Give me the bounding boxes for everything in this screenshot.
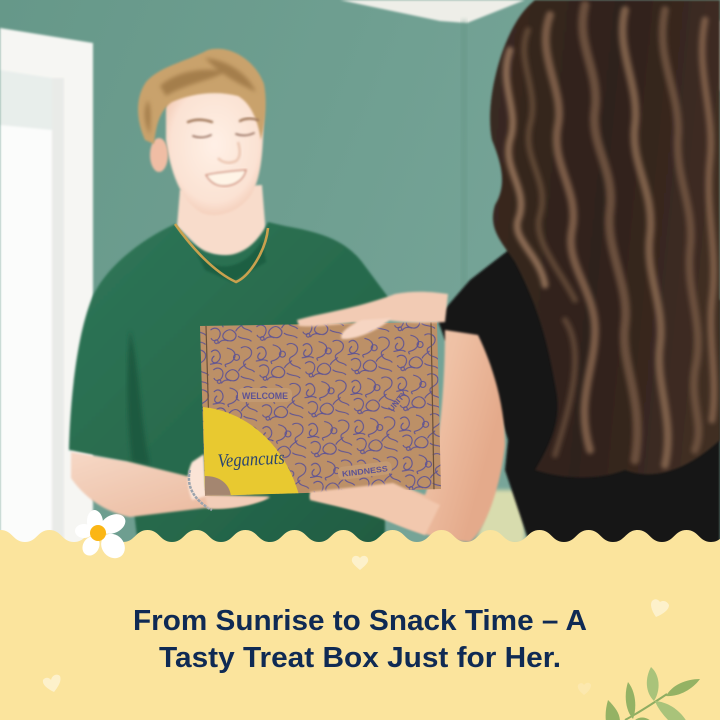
icon: daisy flower [75,509,130,563]
woman upper hand on box [297,292,448,339]
man hand thumb [188,454,206,500]
corner doodle [205,476,231,497]
smile [206,170,246,186]
shirt [69,222,388,545]
nose shadow [218,142,240,163]
man in green shirt [69,49,388,545]
background: green wall [0,0,720,545]
photo: delivery scene [0,0,720,545]
box flap edges [206,322,434,496]
caption text [133,605,587,674]
woman with long dark hair [310,0,720,545]
ear [150,138,168,172]
woman arm [310,330,505,542]
background glimpse near woman [475,490,525,545]
gift box [200,322,441,497]
icon: green leaf sprig [606,667,700,720]
KINDNESS label [337,461,392,480]
man fingers under box [205,496,270,508]
hair mass [490,0,720,478]
icon: heart [352,556,368,570]
eyebrows and eyes [188,119,258,137]
icon: faint heart [578,683,591,695]
WELCOME label: WELCOME [242,391,288,401]
yellow corner [203,407,299,497]
shirt shadow folds [127,330,150,465]
WELCOME label [238,388,292,402]
top right window piece [698,20,720,92]
caption line 1: From Sunrise to Snack Time – A [133,605,587,637]
man forearm and hand [71,452,270,517]
caption line 2: Tasty Treat Box Just for Her. [159,642,561,674]
second finger [341,318,392,339]
gold chain [175,224,268,282]
index finger and back of hand [297,292,448,326]
KINDNESS label: KINDNESS [342,464,389,479]
black dress [437,245,720,545]
icon: heart right [651,599,669,617]
woman lower hand under box [310,483,440,535]
wall corner shading [461,20,467,300]
yellow wavy caption panel [0,530,720,720]
neck [177,185,266,258]
hair [138,49,266,144]
UNITY label: UNITY [387,389,409,413]
icon: heart bottom left [43,675,61,692]
window frame left [0,28,93,545]
hair shading [145,58,256,135]
ceiling corner [340,0,525,23]
box doodle surface [200,322,441,496]
shirt collar inside [196,240,266,282]
bracelet [189,470,212,510]
face [166,87,263,215]
Vegancuts logotype: Vegancuts [217,448,285,472]
hair waves [506,5,714,465]
